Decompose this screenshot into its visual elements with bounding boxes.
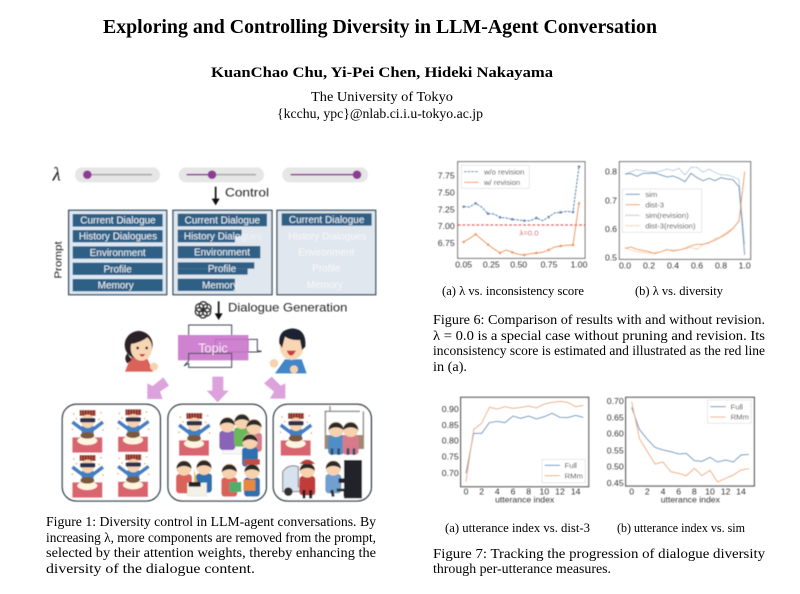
chart: utterance index vs dist-3: 6 <box>511 487 516 497</box>
prompt box full: Environment <box>90 248 146 259</box>
chart: lambda vs inconsistency score: w/ revision <box>483 178 520 187</box>
chart: utterance index vs sim: 4 <box>661 487 666 497</box>
subcaption 7a: (a) utterance index vs. dist-3 <box>445 520 590 535</box>
chart: lambda vs diversity: 0.0 <box>619 260 631 270</box>
chart: lambda vs inconsistency score <box>438 162 588 270</box>
chart: utterance index vs sim: 6 <box>676 487 681 497</box>
prompt box partial: Environment <box>194 248 250 259</box>
prompt box full <box>69 210 167 295</box>
chart: lambda vs diversity <box>605 162 751 270</box>
subcaption 6a: (a) λ vs. inconsistency score <box>442 283 584 298</box>
title: Exploring and Controlling Diversity in LLM-Agent Conversation <box>103 17 657 38</box>
figure 1 caption: selected by their attention weights, thereby enhancing the <box>46 545 376 560</box>
arrow: center <box>207 377 229 402</box>
prompt box full: Current Dialogue <box>80 216 156 227</box>
chart: utterance index vs sim: utterance index <box>661 494 721 504</box>
chart: lambda vs diversity: sim <box>645 190 657 199</box>
prompt box partial: History Dialogues <box>184 231 262 242</box>
chart: lambda vs diversity: 0.2 <box>643 260 655 270</box>
chart: utterance index vs dist-3: 0.85 <box>442 420 459 430</box>
panel: low diversity <box>62 404 160 501</box>
chart: utterance index vs dist-3: 0.70 <box>442 468 459 478</box>
figure 1 diagram: conversation and outputs <box>62 325 371 501</box>
figure 1 caption <box>46 514 376 576</box>
chart: utterance index vs dist-3: Full <box>565 461 577 470</box>
chart: lambda vs inconsistency score: 1.00 <box>571 260 588 270</box>
arrow: dialogue generation <box>215 301 223 320</box>
chart: utterance index vs sim: 0.45 <box>607 478 624 488</box>
chart: lambda vs inconsistency score: 7.75 <box>438 171 455 181</box>
lambda symbol: λ <box>52 165 61 186</box>
chart: utterance index vs sim: 0.50 <box>607 462 624 472</box>
chart: utterance index vs sim: 0.70 <box>607 396 624 406</box>
figure 6 caption <box>433 312 765 375</box>
chart: lambda vs diversity: dist-3 <box>645 200 664 209</box>
prompt box full: History Dialogues <box>79 232 157 243</box>
chart: utterance index vs sim: Full <box>731 402 743 411</box>
slider mid <box>179 167 264 182</box>
prompt box pruned: Profile <box>312 264 341 275</box>
chart: lambda vs inconsistency score: 0.50 <box>510 260 527 270</box>
figure 7 caption: Figure 7: Tracking the progression of dialogue diversity <box>433 546 765 561</box>
prompt box pruned: History Dialogues <box>288 231 366 242</box>
chart: utterance index vs sim: 2 <box>645 487 650 497</box>
prompt box pruned: Current Dialogue <box>289 215 365 226</box>
authors: KuanChao Chu, Yi-Pei Chen, Hideki Nakayama <box>211 65 554 81</box>
figure 6 caption: Figure 6: Comparison of results with and without revision. <box>433 312 765 327</box>
chart: utterance index vs dist-3 <box>442 397 589 504</box>
chart: utterance index vs sim: 14 <box>736 487 746 497</box>
figure 1 caption: diversity of the dialogue content. <box>46 561 255 576</box>
chart: utterance index vs sim: 0.60 <box>607 429 624 439</box>
chart: utterance index vs dist-3: 0.75 <box>442 452 459 462</box>
chart: lambda vs inconsistency score: w/o revision <box>483 167 524 176</box>
panel: high diversity <box>273 404 371 501</box>
icon: man <box>270 328 307 373</box>
chart: lambda vs inconsistency score: 0.75 <box>541 260 558 270</box>
icon: woman <box>125 331 158 372</box>
figure 1 caption: increasing λ, more components are removed from the prompt, <box>46 530 376 545</box>
prompt box full: Profile <box>104 264 132 275</box>
chart: utterance index vs sim: 8 <box>692 487 697 497</box>
chart: lambda vs inconsistency score: 6.75 <box>438 238 455 248</box>
subcaption 7b: (b) utterance index vs. sim <box>617 520 745 535</box>
chart: lambda vs diversity: 0.8 <box>605 167 617 177</box>
speech bubbles and topic: Topic <box>198 341 228 355</box>
chart: lambda vs inconsistency score: 0.05 <box>455 260 472 270</box>
chart: utterance index vs sim: 10 <box>705 487 715 497</box>
arrow: left <box>147 377 169 399</box>
chart: lambda vs diversity: 0.7 <box>605 195 617 205</box>
slider low <box>75 167 160 182</box>
chart: utterance index vs dist-3: utterance index <box>495 494 555 504</box>
chart: utterance index vs sim <box>607 396 754 504</box>
chart: utterance index vs sim: 0 <box>629 487 634 497</box>
label: dialogue generation: Dialogue Generation <box>228 301 347 314</box>
chart: lambda vs diversity: 1.0 <box>739 260 751 270</box>
email: {kcchu, ypc}@nlab.ci.i.u-tokyo.ac.jp <box>277 106 483 121</box>
figure 6 caption: inconsistency score is estimated and illustrated as the red line <box>433 343 765 358</box>
subcaption 6b: (b) λ vs. diversity <box>635 283 723 298</box>
chart: lambda vs inconsistency score: 0.25 <box>483 260 500 270</box>
figure 7 caption: through per-utterance measures. <box>433 561 611 576</box>
chart: lambda vs diversity: dist-3(revision) <box>645 221 696 230</box>
chart: utterance index vs dist-3: 0.90 <box>442 404 459 414</box>
prompt box pruned: Environment <box>298 247 355 258</box>
figure 1 diagram: prompt control <box>52 165 376 320</box>
chart: lambda vs inconsistency score: λ=0.0 <box>520 228 538 237</box>
chart: lambda vs diversity: 0.6 <box>605 224 617 234</box>
chart: utterance index vs dist-3: RMm <box>565 471 583 480</box>
chart: utterance index vs sim: RMm <box>731 413 749 422</box>
chart: utterance index vs dist-3: 10 <box>540 487 549 497</box>
chart: lambda vs inconsistency score: 7.00 <box>438 221 455 231</box>
chart: utterance index vs dist-3: 14 <box>571 487 581 497</box>
arrow: control <box>212 187 220 205</box>
chart: utterance index vs dist-3: 4 <box>495 487 500 497</box>
label: prompt: Prompt <box>53 241 64 279</box>
chart: utterance index vs sim: 0.55 <box>607 445 624 455</box>
chart: utterance index vs sim: 0.65 <box>607 412 624 422</box>
prompt box pruned: Memory <box>307 280 343 291</box>
speech bubbles and topic <box>178 325 262 367</box>
slider high <box>282 167 368 182</box>
figure 6 caption: in (a). <box>433 359 467 375</box>
prompt box partial: Memory <box>202 280 238 291</box>
chart: utterance index vs dist-3: 12 <box>555 487 565 497</box>
prompt box partial: Profile <box>208 264 237 275</box>
chart: lambda vs diversity: 0.4 <box>667 260 679 270</box>
figure 1 caption: Figure 1: Diversity control in LLM-agent conversations. By <box>46 514 376 529</box>
prompt box partial: Current Dialogue <box>185 215 261 226</box>
chart: utterance index vs dist-3: 2 <box>479 487 484 497</box>
affiliation: The University of Tokyo <box>311 89 453 104</box>
figure 6 caption: λ = 0.0 is a special case without pruning and revision. Its <box>433 328 765 343</box>
chart: lambda vs diversity: 0.6 <box>691 260 703 270</box>
label: control: Control <box>225 187 269 200</box>
chart: utterance index vs dist-3: 0 <box>464 487 469 497</box>
chart: lambda vs diversity: 0.8 <box>715 260 727 270</box>
chart: lambda vs diversity: 0.5 <box>605 253 617 263</box>
chart: utterance index vs dist-3: 8 <box>526 487 531 497</box>
chart: utterance index vs dist-3: 0.80 <box>442 436 459 446</box>
prompt box partial <box>173 210 272 295</box>
chart: utterance index vs sim: 12 <box>721 487 731 497</box>
arrow: right <box>264 377 285 399</box>
panel: medium diversity <box>168 404 266 501</box>
figure 7 caption <box>433 546 765 576</box>
prompt box full: Memory <box>98 281 134 292</box>
icon: openai knot <box>195 302 211 318</box>
chart: lambda vs inconsistency score: 7.25 <box>438 204 455 214</box>
chart: lambda vs diversity: sim(revision) <box>645 211 689 220</box>
prompt box pruned <box>277 210 376 295</box>
chart: lambda vs inconsistency score: 7.50 <box>438 188 455 198</box>
